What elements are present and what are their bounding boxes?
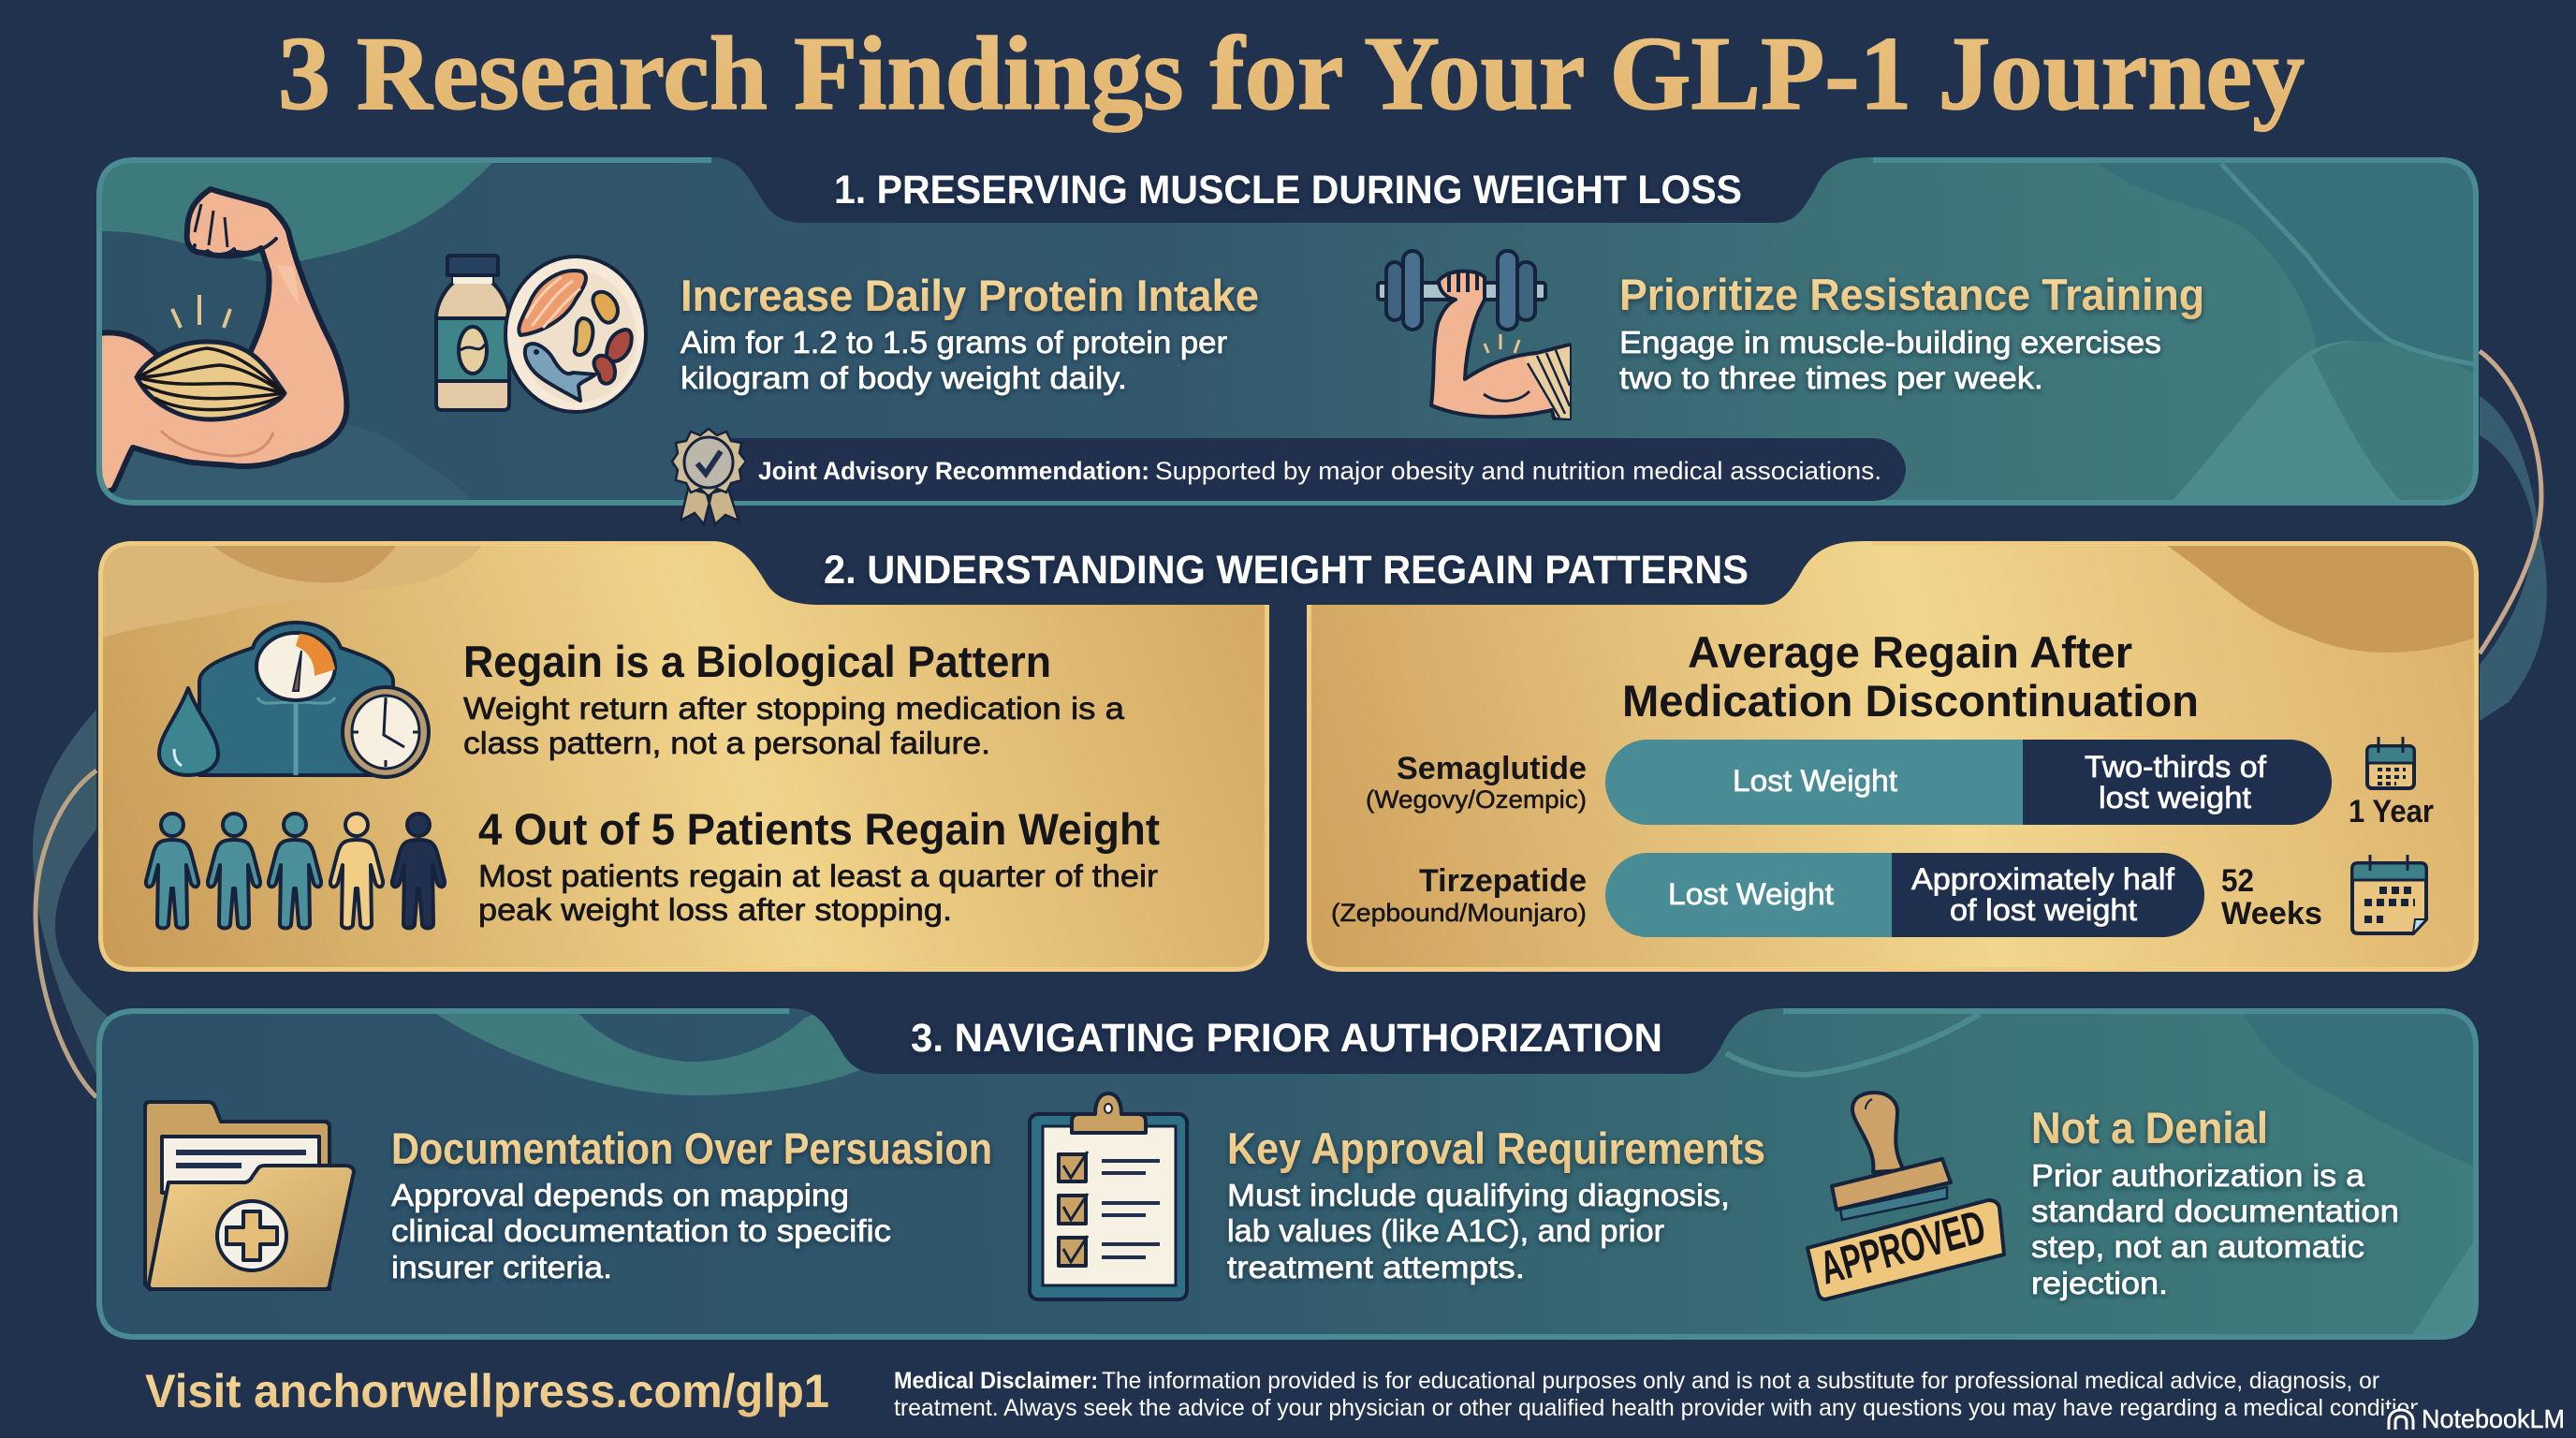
- bar: semaglutide regain: lost weight: [2099, 781, 2251, 814]
- icon: dumbbell arm: [1378, 251, 1570, 418]
- bar: tirzepatide regain: of lost weight: [1950, 893, 2137, 927]
- text: documentation over persuasion: insurer criteria.: [391, 1250, 612, 1284]
- label: semaglutide: (Wegovy/Ozempic): [1366, 785, 1587, 814]
- text: resistance training: [1619, 270, 2204, 395]
- medical disclaimer: Medical Disclaimer:: [894, 1368, 1098, 1394]
- text: four of five patients: 4 Out of 5 Patients Regain Weight: [478, 804, 1160, 854]
- text: biological pattern: Weight return after stopping medication is a: [463, 691, 1125, 726]
- icon: small calendar: [2367, 737, 2414, 788]
- text: documentation over persuasion: clinical documentation to specific: [391, 1213, 891, 1248]
- label: fifty-two weeks: [2221, 863, 2322, 932]
- text: key approval requirements: lab values (like A1C), and prior: [1227, 1213, 1664, 1248]
- callout: joint advisory recommendation: [721, 438, 1906, 501]
- text: not a denial: [2031, 1103, 2399, 1300]
- chart title: Average Regain After: [1688, 627, 2132, 677]
- section heading 3: 3. NAVIGATING PRIOR AUTHORIZATION: [911, 1016, 1662, 1061]
- panel: navigating prior authorization: [96, 1008, 2479, 1340]
- text: resistance training: Engage in muscle-building exercises: [1619, 325, 2161, 360]
- footer link: Visit anchorwellpress.com/glp1: [145, 1365, 829, 1417]
- chart title: Medication Discontinuation: [1622, 676, 2199, 726]
- medical disclaimer: treatment. Always seek the advice of your physician or other qualified health provider with any questions you may have regarding a medical condition.: [894, 1395, 2429, 1421]
- text: increase protein: Increase Daily Protein Intake: [681, 271, 1259, 320]
- icon: approved stamp: [1808, 1093, 2004, 1299]
- text: documentation over persuasion: Documentation Over Persuasion: [391, 1123, 992, 1173]
- bar: semaglutide regain: Lost Weight: [1733, 764, 1897, 798]
- text: not a denial: step, not an automatic: [2031, 1229, 2364, 1264]
- text: biological pattern: [463, 637, 1125, 760]
- icon: medical folder: [145, 1102, 354, 1289]
- bar: tirzepatide regain: Lost Weight: [1668, 877, 1834, 911]
- text: resistance training: Prioritize Resistance Training: [1619, 270, 2204, 319]
- bar: semaglutide regain: [1605, 740, 2332, 825]
- icon: flexed arm with bicep: [94, 189, 346, 496]
- bar: tirzepatide regain: [1605, 853, 2204, 937]
- text: four of five patients: [478, 804, 1160, 927]
- panel: preserving muscle: [94, 157, 2480, 524]
- callout: joint advisory recommendation: Supported by major obesity and nutrition medical associations.: [1155, 457, 1881, 485]
- text: resistance training: two to three times per week.: [1619, 360, 2043, 395]
- decorative swirl left: [33, 710, 110, 1097]
- medical disclaimer: The information provided is for educational purposes only and is not a substitute for professional medical advice, diagnosis, or: [1102, 1368, 2379, 1394]
- decorative swirl right: [2480, 351, 2547, 721]
- icon: large calendar: [2352, 855, 2426, 933]
- icon: clipboard checklist: [1030, 1093, 1187, 1299]
- NotebookLM watermark: NotebookLM: [2422, 1404, 2565, 1433]
- text: increase protein: [681, 271, 1259, 395]
- icon: five people: [146, 814, 445, 929]
- medical disclaimer: [894, 1368, 2429, 1421]
- chart title: [1622, 627, 2199, 726]
- icon: approved stamp: APPROVED: [1814, 1200, 1991, 1295]
- text: key approval requirements: treatment attempts.: [1227, 1250, 1525, 1284]
- text: biological pattern: Regain is a Biological Pattern: [463, 637, 1051, 686]
- icon: badge with check: [672, 429, 746, 524]
- icon: protein bottle and plate: [436, 256, 646, 412]
- text: key approval requirements: [1227, 1123, 1765, 1284]
- text: four of five patients: peak weight loss after stopping.: [478, 892, 952, 927]
- NotebookLM watermark: [2385, 1395, 2576, 1438]
- text: key approval requirements: Key Approval Requirements: [1227, 1123, 1765, 1173]
- label: tirzepatide: (Zepbound/Mounjaro): [1331, 899, 1587, 927]
- section heading 1: 1. PRESERVING MUSCLE DURING WEIGHT LOSS: [834, 168, 1742, 213]
- label: semaglutide: [1366, 751, 1587, 814]
- text: documentation over persuasion: Approval depends on mapping: [391, 1178, 849, 1212]
- text: not a denial: Prior authorization is a: [2031, 1158, 2365, 1193]
- title: 3 Research Findings for Your GLP-1 Journey: [278, 16, 2305, 132]
- label: tirzepatide: [1331, 863, 1587, 927]
- bar: semaglutide regain: Two-thirds of: [2085, 750, 2266, 784]
- text: not a denial: rejection.: [2031, 1266, 2168, 1300]
- bar: tirzepatide regain: Approximately half: [1911, 862, 2174, 896]
- text: documentation over persuasion: [391, 1123, 992, 1284]
- section heading 2: 2. UNDERSTANDING WEIGHT REGAIN PATTERNS: [824, 548, 1749, 593]
- text: key approval requirements: Must include qualifying diagnosis,: [1227, 1178, 1730, 1212]
- text: increase protein: Aim for 1.2 to 1.5 grams of protein per: [681, 325, 1227, 360]
- label: tirzepatide: Tirzepatide: [1419, 863, 1587, 899]
- text: not a denial: Not a Denial: [2031, 1103, 2268, 1152]
- callout: joint advisory recommendation: Joint Advisory Recommendation:: [758, 457, 1149, 485]
- text: four of five patients: Most patients regain at least a quarter of their: [478, 858, 1158, 893]
- panel: regain patterns left: [98, 541, 1749, 972]
- label: fifty-two weeks: Weeks: [2221, 896, 2322, 932]
- panel: average regain chart: [1307, 541, 2479, 972]
- label: one year: 1 Year: [2349, 794, 2434, 829]
- text: not a denial: standard documentation: [2031, 1194, 2399, 1228]
- text: increase protein: kilogram of body weight daily.: [681, 360, 1127, 395]
- text: biological pattern: class pattern, not a personal failure.: [463, 726, 990, 760]
- label: semaglutide: Semaglutide: [1397, 751, 1587, 786]
- icon: scale drop and clock: [159, 623, 429, 777]
- label: fifty-two weeks: 52: [2221, 863, 2254, 899]
